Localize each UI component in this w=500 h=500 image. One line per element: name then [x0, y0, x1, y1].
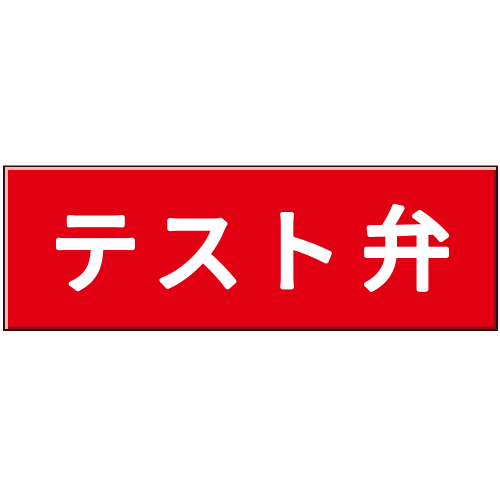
label text: 弁: [362, 201, 451, 301]
label text: ス: [153, 204, 243, 304]
label text: [50, 201, 451, 304]
outer frame: [3, 166, 498, 331]
label text: テ: [50, 204, 140, 304]
label text: ト: [253, 204, 343, 304]
